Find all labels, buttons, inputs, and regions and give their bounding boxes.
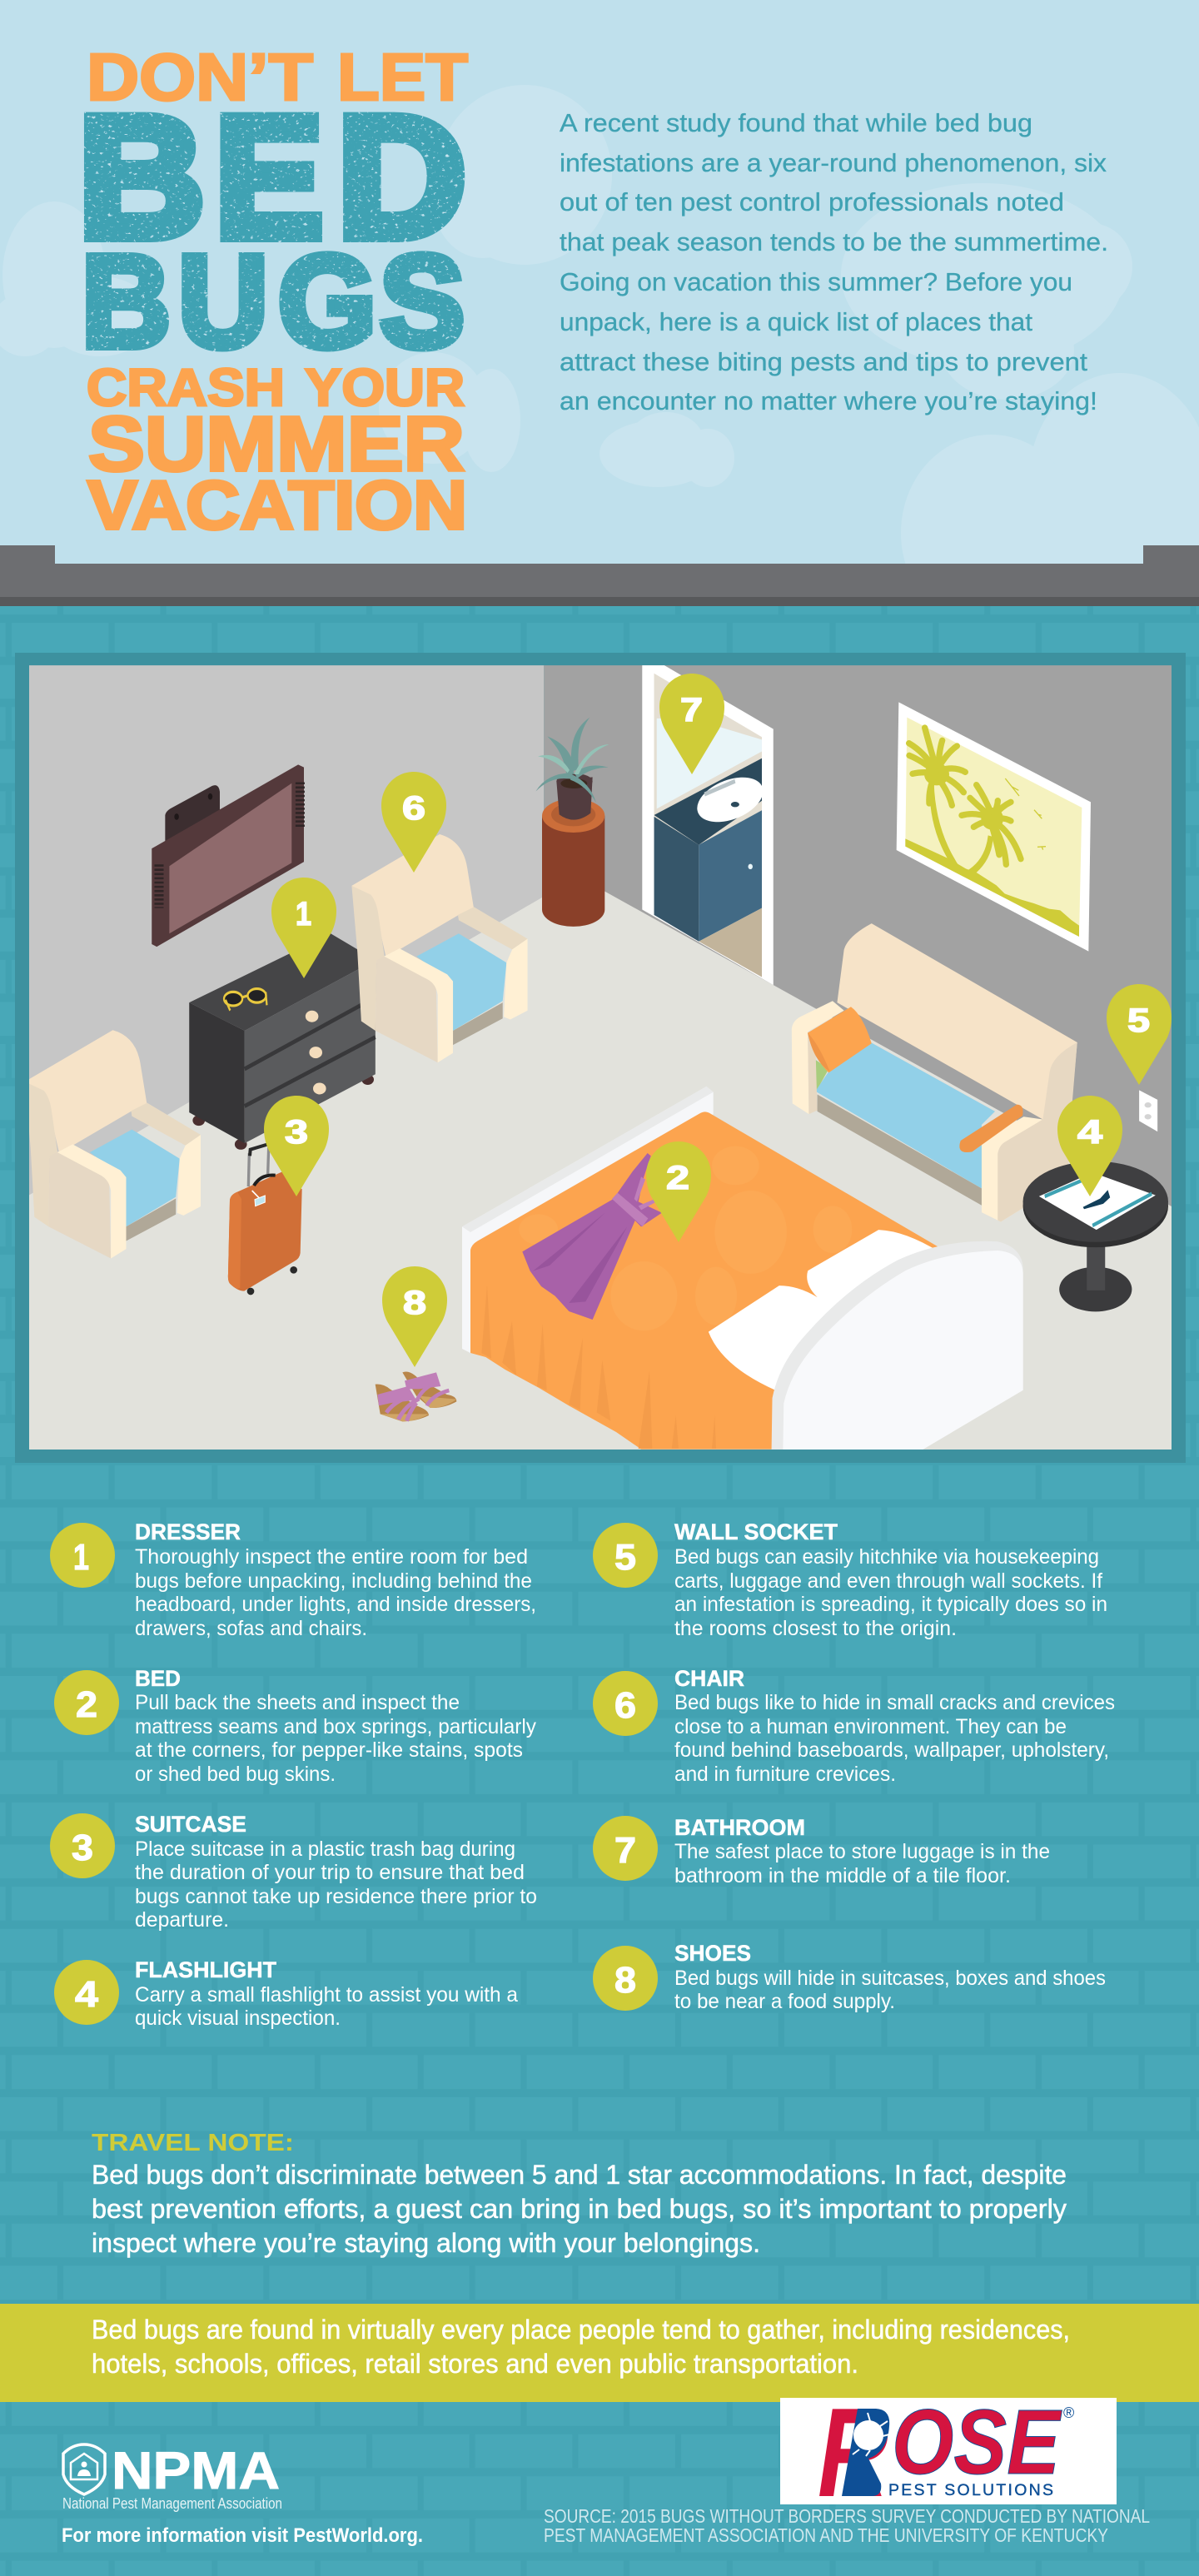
pin 5 [1107,984,1172,1085]
headboard rail [462,1087,714,1353]
title: U [178,229,268,375]
item 4: flashlight: quick visual inspection. [135,2007,341,2030]
item 3: suitcase: Place suitcase in a plastic trash bag during [135,1838,515,1861]
item 5: wall socket [593,1519,1107,1640]
logo: NPMA: National Pest Management Association [62,2495,282,2512]
intro text: out of ten pest control professionals noted [560,187,1064,216]
pin 8 [382,1266,447,1367]
pin 1: 1 [296,896,311,932]
item 6: chair [593,1666,1115,1786]
pedestal [542,798,604,927]
bathroom door [642,665,774,985]
title: YOUR [305,359,465,417]
item 3: suitcase: SUITCASE [135,1812,246,1837]
item 7: bathroom: The safest place to store luggage is in the [674,1840,1050,1863]
item 8: shoes: to be near a food supply. [674,1990,895,2013]
panel: hotel room scene [15,653,1186,1463]
item 1: dresser: DRESSER [135,1519,241,1544]
pin 6: 6 [402,790,425,827]
item 1: dresser: drawers, sofas and chairs. [135,1617,367,1640]
logo: Rose Pest Solutions: PEST SOLUTIONS [888,2481,1053,2499]
sofa [792,923,1077,1222]
logo: Rose Pest Solutions [780,2382,1117,2524]
travel note: Bed bugs don’t discriminate between 5 and 1 star accommodations. In fact, despite [92,2160,1067,2190]
intro text: unpack, here is a quick list of places that [560,307,1032,336]
potted plant [535,718,609,820]
item 8: shoes: SHOES [674,1941,751,1966]
title: B [82,229,171,375]
item 7: bathroom: BATHROOM [674,1815,805,1840]
travel note: TRAVEL NOTE: [92,2130,294,2156]
side table with flashlight [1023,1161,1168,1311]
callout band [0,2304,1199,2402]
item 3: suitcase: departure. [135,1908,229,1932]
item 5: wall socket: 5 [614,1537,636,1578]
pin 2 [646,1141,711,1242]
logo: Rose Pest Solutions: R [818,2382,888,2524]
item 5: wall socket: an infestation is spreading, it typically does so in [674,1593,1107,1616]
item 8: shoes [593,1941,1106,2013]
source note [544,2505,1150,2546]
pin 7 [659,674,724,774]
title [78,40,468,544]
item 8: shoes: Bed bugs will hide in suitcases, boxes and shoes [674,1967,1106,1990]
item 6: chair: close to a human environment. They can be [674,1715,1067,1738]
bed [462,1087,942,1450]
item 5: wall socket: WALL SOCKET [674,1519,838,1544]
item 4: flashlight [54,1957,518,2030]
pin 8: 8 [403,1285,426,1321]
clouds [0,85,1199,564]
item 2: bed: 2 [76,1684,97,1725]
sandals [376,1371,456,1421]
item 2: bed: or shed bed bug skins. [135,1763,336,1786]
source note: PEST MANAGEMENT ASSOCIATION AND THE UNIVERSITY OF KENTUCKY [544,2524,1108,2546]
item 2: bed: Pull back the sheets and inspect the [135,1691,460,1714]
title: E [215,81,323,273]
item 1: dresser [50,1519,536,1640]
intro text [560,108,1108,415]
roof ledge [0,545,1199,606]
title: SUMMER [88,400,465,487]
room illustration [25,665,1172,1450]
item 1: dresser: headboard, under lights, and inside dressers, [135,1593,536,1616]
suitcase [228,1145,302,1295]
intro text: that peak season tends to be the summertime. [560,227,1108,256]
beach painting [897,702,1091,952]
item 6: chair: and in furniture crevices. [674,1763,896,1786]
item 2: bed [54,1666,536,1786]
item 4: flashlight: Carry a small flashlight to assist you with a [135,1983,518,2007]
logo: Rose Pest Solutions: OSE [892,2391,1062,2494]
item 6: chair: Bed bugs like to hide in small cracks and crevices [674,1691,1115,1714]
title: VACATION [87,466,467,544]
pin 3: 3 [285,1114,308,1151]
intro text: Going on vacation this summer? Before you [560,267,1072,296]
item 3: suitcase: the duration of your trip to ensure that bed [135,1861,525,1884]
item 6: chair: CHAIR [674,1666,744,1691]
item 3: suitcase: bugs cannot take up residence there prior to [135,1885,537,1908]
title: S [380,229,465,375]
item 7: bathroom [593,1815,1050,1887]
armchair right [351,834,528,1062]
title: LET [337,40,468,114]
title: CRASH [87,359,285,417]
item 6: chair: found behind baseboards, wallpaper, upholstery, [674,1738,1109,1762]
purple dress [522,1153,662,1320]
title: B [78,81,205,273]
wall socket [1139,1090,1157,1131]
logo: NPMA: NPMA [112,2442,280,2500]
item 5: wall socket: the rooms closest to the origin. [674,1617,957,1640]
item 1: dresser: bugs before unpacking, including behind the [135,1569,532,1593]
dresser with sunglasses [189,933,376,1150]
bedspread [470,1111,942,1450]
pin 3 [264,1096,329,1196]
item 1: dresser: 1 [73,1537,89,1578]
title: G [278,229,376,375]
logo: NPMA [62,2442,282,2512]
television [152,764,304,947]
brick wall background [0,606,1199,2576]
pin 2: 2 [666,1160,689,1196]
item 2: bed: mattress seams and box springs, particularly [135,1715,536,1738]
item 2: bed: BED [135,1666,181,1691]
pin 6 [381,772,446,873]
pin 4 [1057,1096,1122,1196]
item 3: suitcase [50,1812,537,1932]
icon: shield with house [63,2444,105,2494]
title: D [337,81,466,273]
travel note [92,2130,1067,2258]
item 4: flashlight: 4 [75,1974,99,2015]
more information link text: For more information visit PestWorld.org. [62,2524,423,2547]
intro text: infestations are a year-round phenomenon, six [560,148,1107,177]
pillows and footboard [709,1230,1023,1450]
item 4: flashlight: FLASHLIGHT [135,1957,276,1982]
item 7: bathroom: bathroom in the middle of a tile floor. [674,1864,1011,1887]
sky background [0,0,1199,564]
travel note: best prevention efforts, a guest can bring in bed bugs, so it’s important to properly [92,2194,1067,2224]
intro text: A recent study found that while bed bug [560,108,1032,137]
callout band: Bed bugs are found in virtually every place people tend to gather, including residences, [92,2315,1070,2345]
logo: Rose Pest Solutions: ® [1063,2404,1074,2421]
scene frame [15,653,1186,1463]
intro text: attract these biting pests and tips to prevent [560,347,1087,376]
pin 4: 4 [1077,1114,1103,1151]
item 7: bathroom: 7 [614,1830,636,1871]
item 3: suitcase: 3 [72,1828,93,1868]
item 5: wall socket: carts, luggage and even through wall sockets. If [674,1569,1102,1593]
item 5: wall socket: Bed bugs can easily hitchhike via housekeeping [674,1545,1099,1569]
item 1: dresser: Thoroughly inspect the entire room for bed [135,1545,528,1569]
intro text: an encounter no matter where you’re staying! [560,386,1097,415]
pin 7: 7 [680,692,703,729]
item 6: chair: 6 [614,1685,636,1726]
callout band: hotels, schools, offices, retail stores and even public transportation. [92,2349,858,2379]
item 2: bed: at the corners, for pepper-like stains, spots [135,1738,523,1762]
travel note: inspect where you’re staying along with your belongings. [92,2228,760,2258]
title: DON’T [87,40,313,114]
item 8: shoes: 8 [614,1960,636,2001]
walls and floor [28,665,1172,1450]
pin 5: 5 [1127,1002,1150,1039]
armchair left [25,1030,201,1259]
pin 1 [271,878,336,978]
